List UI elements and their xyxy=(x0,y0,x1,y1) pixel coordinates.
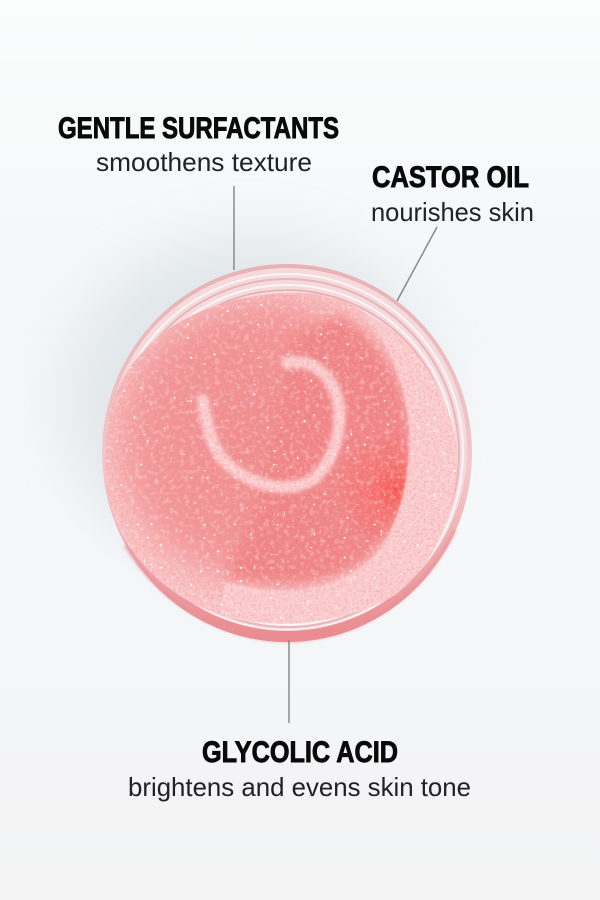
leader line xyxy=(397,227,437,301)
leader line xyxy=(233,186,235,270)
mottled light xyxy=(106,293,456,623)
jar thread lines xyxy=(111,274,463,630)
pale right wall of scrub xyxy=(222,315,456,623)
scooped bowl xyxy=(225,315,410,583)
scrub jar photo xyxy=(100,264,480,642)
sugar grain xyxy=(105,293,457,624)
deep red shadow xyxy=(347,441,408,541)
heading: GENTLE SURFACTANTS xyxy=(58,112,339,145)
callout: gentle surfactants xyxy=(58,112,339,270)
leader line xyxy=(288,640,290,723)
scrub mid pink xyxy=(114,298,410,586)
description: smoothens texture xyxy=(96,147,312,177)
description: nourishes skin xyxy=(371,197,534,227)
scrub pale base xyxy=(107,293,454,623)
callout: glycolic acid xyxy=(128,640,471,802)
jar translucent inner wall xyxy=(107,268,467,630)
sugar sparkle xyxy=(105,293,456,622)
jar outer rim xyxy=(102,264,472,642)
callout: castor oil xyxy=(371,161,534,301)
description: brightens and evens skin tone xyxy=(128,772,471,802)
swirl ridge xyxy=(203,362,340,487)
heading: CASTOR OIL xyxy=(372,161,529,194)
bottom jar edge xyxy=(125,530,455,641)
scrub xyxy=(105,293,457,624)
heading: GLYCOLIC ACID xyxy=(202,736,398,769)
